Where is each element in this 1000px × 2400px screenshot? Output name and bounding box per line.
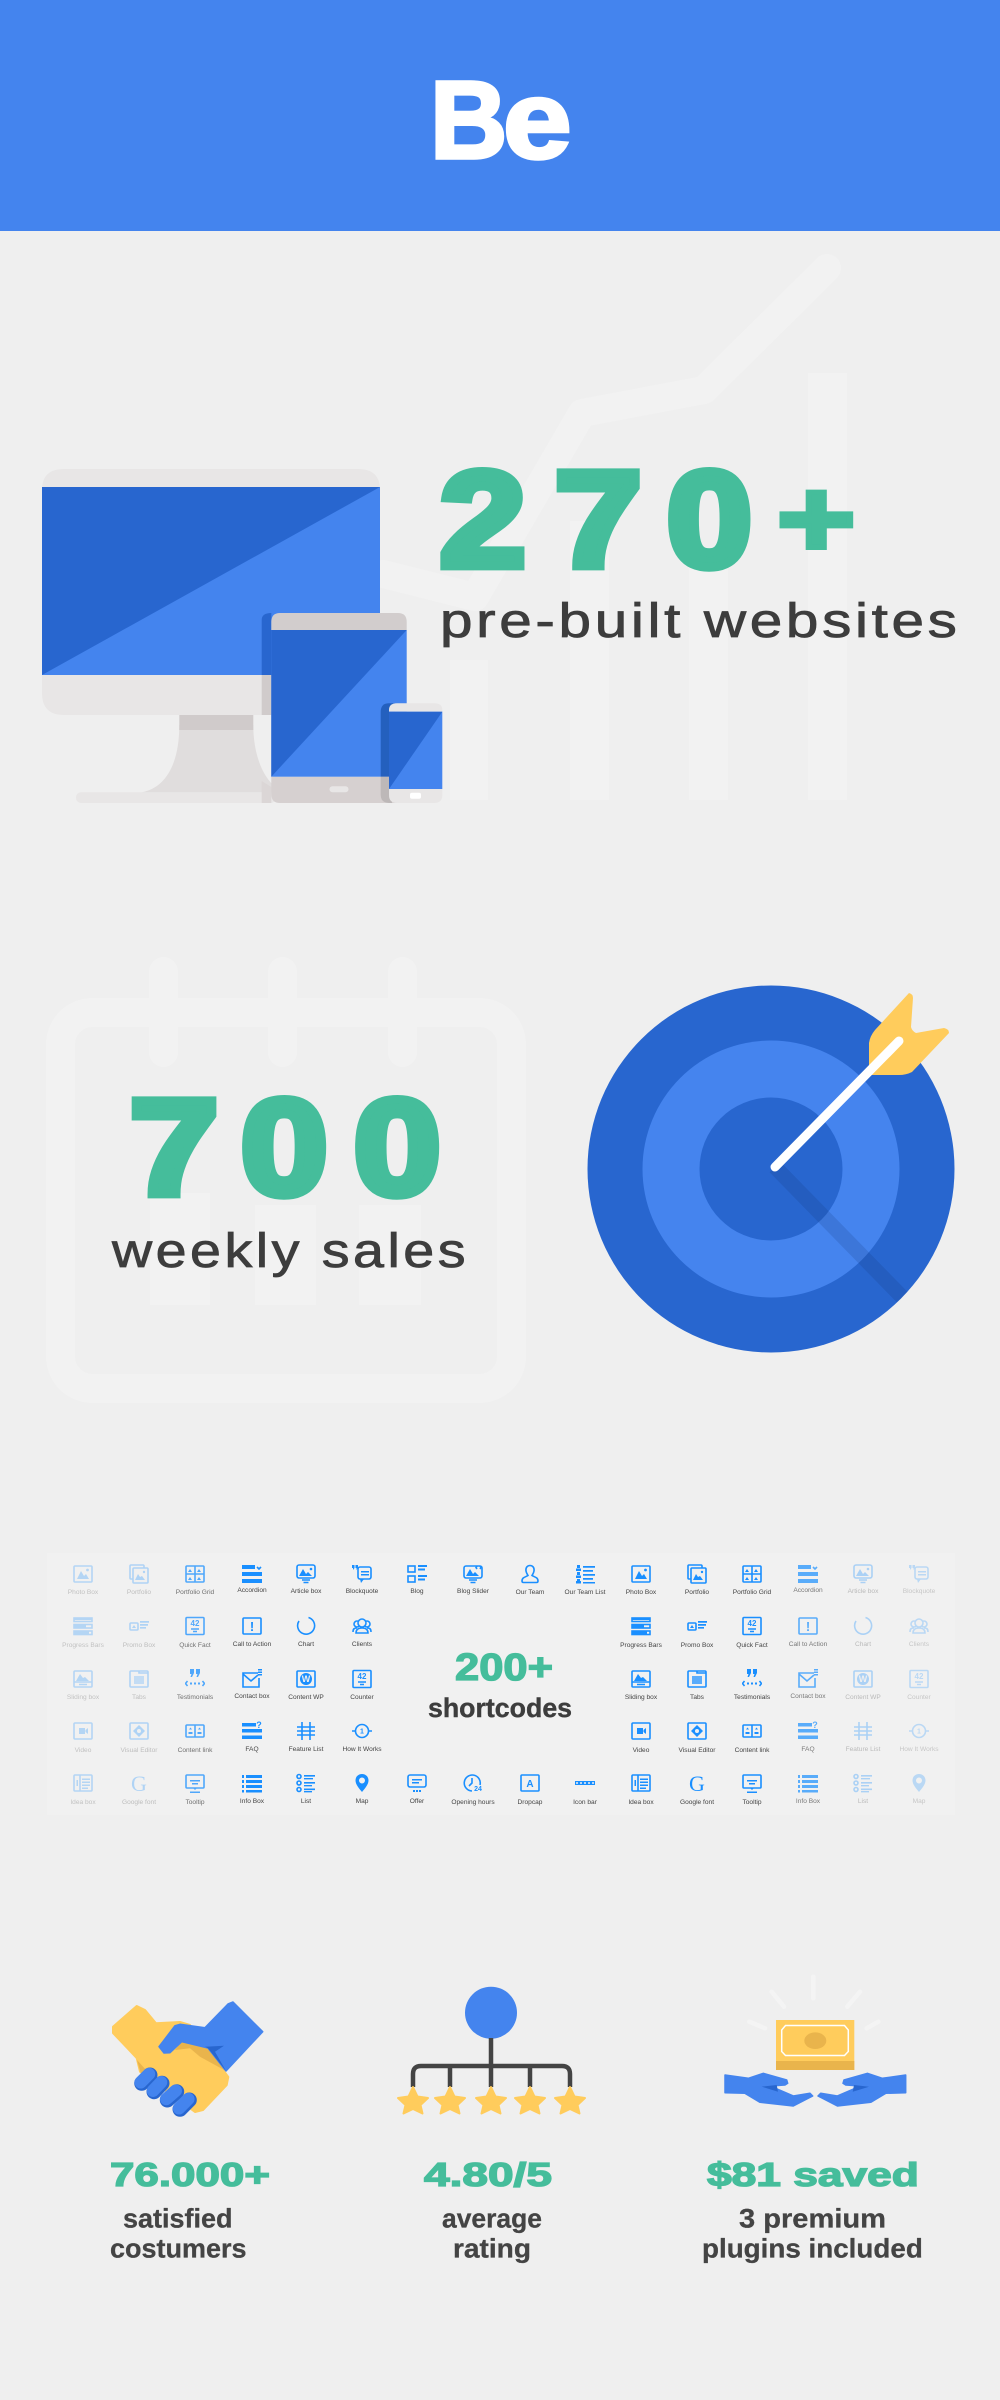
cell: Info Box: Info Box — [796, 1798, 821, 1805]
watermark: growth bar chart — [383, 268, 847, 800]
cell: Feature List: Feature List — [846, 1746, 881, 1753]
cell: Our Team — [516, 1566, 545, 1596]
cell: Tooltip: Tooltip — [185, 1799, 205, 1806]
cell: How It Works — [342, 1724, 382, 1753]
cell: How It Works: How It Works — [899, 1746, 939, 1753]
stat: 700: 0 — [354, 1071, 441, 1223]
panel: shortcodes grid — [47, 1553, 955, 1815]
logo: Be: B — [430, 60, 507, 182]
cell: List — [297, 1774, 315, 1805]
cell: Clients: Clients — [909, 1641, 930, 1648]
cell: Idea box — [70, 1775, 96, 1806]
cell: Idea box: Idea box — [70, 1799, 96, 1806]
cell: How It Works — [899, 1724, 939, 1753]
cell: Opening hours — [451, 1775, 495, 1806]
cell: Article box — [848, 1565, 879, 1595]
cell: Progress Bars: Progress Bars — [62, 1642, 105, 1649]
cell: Google font — [680, 1771, 714, 1806]
cell: FAQ — [242, 1720, 262, 1753]
cell: Contact box: Contact box — [790, 1693, 826, 1700]
cell: Visual Editor: Visual Editor — [679, 1747, 716, 1754]
cell: Contact box — [234, 1669, 270, 1700]
stat: 4.80/5: 4.80/5 — [424, 2156, 552, 2193]
cell: Portfolio: Portfolio — [127, 1589, 151, 1596]
cell: Photo Box: Photo Box — [626, 1589, 657, 1596]
cell: Google font: Google font — [680, 1799, 714, 1806]
stat: 270+: 0 — [667, 443, 752, 595]
cell: Accordion — [793, 1565, 823, 1594]
cell: Progress Bars: Progress Bars — [620, 1642, 663, 1649]
cell: Google font: Google font — [122, 1799, 156, 1806]
cell: Feature List — [289, 1722, 324, 1753]
cell: Offer — [408, 1775, 426, 1805]
stat: 270+: + — [777, 457, 855, 579]
cell: Contact box — [790, 1669, 826, 1700]
cell: Content link: Content link — [178, 1747, 213, 1754]
logo: Be — [430, 58, 572, 182]
cell: Clients — [352, 1619, 373, 1648]
cell: Counter — [907, 1670, 932, 1701]
caption: average rating: average — [442, 2203, 542, 2234]
cell: Content link — [735, 1725, 770, 1754]
cell: Sliding box — [67, 1671, 100, 1701]
caption: 3 premium plugins included — [702, 2203, 923, 2263]
cell: Article box — [291, 1565, 322, 1595]
cell: Sliding box: Sliding box — [625, 1694, 658, 1701]
cell: Video — [632, 1723, 650, 1754]
cell: Map — [356, 1774, 369, 1805]
stat: 200+: 200+ — [455, 1646, 553, 1688]
stat: 700: 7 — [130, 1072, 218, 1223]
cell: Promo Box: Promo Box — [123, 1642, 156, 1649]
cell: Blockquote: Blockquote — [346, 1588, 379, 1595]
cell: Tooltip — [742, 1775, 762, 1806]
cell: Blockquote — [346, 1565, 379, 1595]
cell: FAQ: FAQ — [245, 1746, 259, 1753]
cell: Dropcap — [518, 1775, 543, 1806]
cell: Feature List — [846, 1722, 881, 1753]
cell: Chart — [298, 1618, 315, 1648]
cell: Opening hours: Opening hours — [451, 1799, 495, 1806]
cell: Call to Action: Call to Action — [789, 1641, 828, 1648]
cell: Sliding box: Sliding box — [67, 1694, 100, 1701]
cell: Blog: Blog — [410, 1588, 424, 1595]
cell: Idea box: Idea box — [628, 1799, 654, 1806]
cell: Offer: Offer — [410, 1798, 425, 1805]
cell: Content WP — [288, 1671, 324, 1701]
caption: satisfied costumers — [110, 2204, 247, 2264]
cell: Tabs — [688, 1671, 706, 1701]
cell: Progress Bars — [62, 1618, 105, 1649]
cell: FAQ: FAQ — [801, 1746, 815, 1753]
cell: List: List — [301, 1798, 311, 1805]
cell: Testimonials: Testimonials — [177, 1694, 214, 1701]
caption: shortcodes: shortcodes — [428, 1693, 572, 1723]
cell: Dropcap: Dropcap — [518, 1799, 543, 1806]
cell: Portfolio Grid — [176, 1566, 215, 1596]
cell: Tooltip — [185, 1775, 205, 1806]
stat: 270+ — [440, 443, 855, 595]
watermark: calendar — [60, 957, 512, 1388]
stat: 270+: 7 — [555, 443, 642, 595]
cell: Tabs: Tabs — [132, 1694, 147, 1701]
cell: Our Team: Our Team — [516, 1589, 545, 1596]
cell: Chart — [855, 1618, 872, 1648]
caption: satisfied costumers: satisfied — [123, 2204, 233, 2234]
cell: Content WP: Content WP — [845, 1694, 881, 1701]
cell: List — [854, 1774, 872, 1805]
cell: Quick Fact — [736, 1618, 768, 1649]
cell: Tooltip: Tooltip — [742, 1799, 762, 1806]
cell: Promo Box — [123, 1621, 156, 1649]
cell: Accordion — [237, 1565, 267, 1594]
cell: Call to Action — [233, 1618, 272, 1648]
header band — [0, 0, 1000, 231]
cell: Clients — [909, 1619, 930, 1648]
cell: Tabs: Tabs — [690, 1694, 705, 1701]
caption: satisfied costumers: costumers — [110, 2234, 247, 2264]
cell: Testimonials: Testimonials — [734, 1694, 771, 1701]
cell: Idea box — [628, 1775, 654, 1806]
cell: Quick Fact: Quick Fact — [179, 1642, 211, 1649]
cell: List: List — [858, 1798, 868, 1805]
cell: Contact box: Contact box — [234, 1693, 270, 1700]
icon: hands with banknote — [725, 1977, 906, 2106]
cell: Our Team List — [565, 1565, 606, 1596]
cell: Chart: Chart — [298, 1641, 314, 1648]
stat: 700: 0 — [241, 1071, 328, 1223]
cell: Photo Box: Photo Box — [68, 1589, 99, 1596]
cell: Accordion: Accordion — [793, 1587, 823, 1594]
cell: Progress Bars — [620, 1618, 663, 1649]
cell: Content WP: Content WP — [288, 1694, 324, 1701]
cell: Photo Box — [626, 1566, 657, 1596]
cell: Portfolio — [127, 1565, 151, 1596]
cell: Video — [74, 1723, 92, 1754]
cell: Tabs — [130, 1671, 148, 1701]
stat: $81 saved: $81 saved — [707, 2157, 919, 2194]
cell: Info Box: Info Box — [240, 1798, 265, 1805]
cell: Chart: Chart — [855, 1641, 871, 1648]
caption: 3 premium plugins included: plugins included — [702, 2233, 923, 2263]
cell: Clients: Clients — [352, 1641, 373, 1648]
cell: Portfolio — [685, 1565, 709, 1596]
cell: Visual Editor — [121, 1723, 158, 1754]
cell: Our Team List: Our Team List — [565, 1589, 606, 1596]
icon: smartphone — [381, 703, 442, 803]
cell: Video: Video — [75, 1747, 92, 1754]
stat: 270+: 2 — [440, 444, 526, 595]
cell: Photo Box — [68, 1566, 99, 1596]
cell: Testimonials — [177, 1669, 214, 1701]
cell: Map: Map — [913, 1798, 926, 1805]
cell: Content link — [178, 1725, 213, 1754]
cell: Counter: Counter — [350, 1694, 375, 1701]
icon: desktop monitor — [42, 469, 380, 803]
cell: FAQ — [798, 1720, 818, 1753]
cell: Blog Slider: Blog Slider — [457, 1588, 490, 1595]
cell: Content WP — [845, 1671, 881, 1701]
cell: Portfolio: Portfolio — [685, 1589, 709, 1596]
stat: 700 — [130, 1071, 441, 1223]
cell: Map — [912, 1774, 926, 1805]
logo: Be: e — [503, 58, 572, 182]
cell: Accordion: Accordion — [237, 1587, 267, 1594]
cell: Map: Map — [356, 1798, 369, 1805]
cell: Testimonials — [734, 1669, 771, 1701]
icon: rating tree with stars — [398, 1987, 585, 2114]
cell: Visual Editor: Visual Editor — [121, 1747, 158, 1754]
cell: Promo Box: Promo Box — [681, 1642, 714, 1649]
cell: Visual Editor — [679, 1723, 716, 1754]
cell: Google font — [122, 1771, 156, 1806]
cell: Promo Box — [681, 1621, 714, 1649]
stat: 76.000+: 76.000+ — [110, 2157, 270, 2194]
icon: target with arrow — [588, 986, 954, 1352]
cell: Portfolio Grid: Portfolio Grid — [176, 1589, 215, 1596]
icon: handshake — [113, 2002, 263, 2112]
cell: Feature List: Feature List — [289, 1746, 324, 1753]
cell: Blockquote — [903, 1565, 936, 1595]
cell: Article box: Article box — [848, 1588, 879, 1595]
cell: Portfolio Grid — [733, 1566, 772, 1596]
cell: Counter — [350, 1670, 375, 1701]
cell: Icon bar: Icon bar — [573, 1799, 598, 1806]
caption: average rating: rating — [453, 2233, 531, 2263]
caption: weekly sales: weekly sales — [111, 1225, 469, 1278]
caption: average rating — [442, 2203, 542, 2263]
cell: How It Works: How It Works — [342, 1746, 382, 1753]
cell: Sliding box — [625, 1671, 658, 1701]
cell: Video: Video — [633, 1747, 650, 1754]
cell: Quick Fact: Quick Fact — [736, 1642, 768, 1649]
cell: Quick Fact — [179, 1618, 211, 1649]
cell: Blockquote: Blockquote — [903, 1588, 936, 1595]
cell: Blog Slider — [457, 1566, 490, 1595]
caption: pre-built websites: pre-built websites — [440, 595, 961, 648]
cell: Blog — [408, 1565, 427, 1595]
icon: tablet — [262, 613, 407, 803]
cell: Call to Action — [789, 1618, 828, 1648]
cell: Info Box — [240, 1775, 265, 1805]
cell: Info Box — [796, 1775, 821, 1805]
cell: Icon bar — [573, 1781, 598, 1806]
cell: Content link: Content link — [735, 1747, 770, 1754]
cell: Article box: Article box — [291, 1588, 322, 1595]
cell: Counter: Counter — [907, 1694, 932, 1701]
cell: Portfolio Grid: Portfolio Grid — [733, 1589, 772, 1596]
cell: Call to Action: Call to Action — [233, 1641, 272, 1648]
caption: 3 premium plugins included: 3 premium — [739, 2203, 886, 2233]
